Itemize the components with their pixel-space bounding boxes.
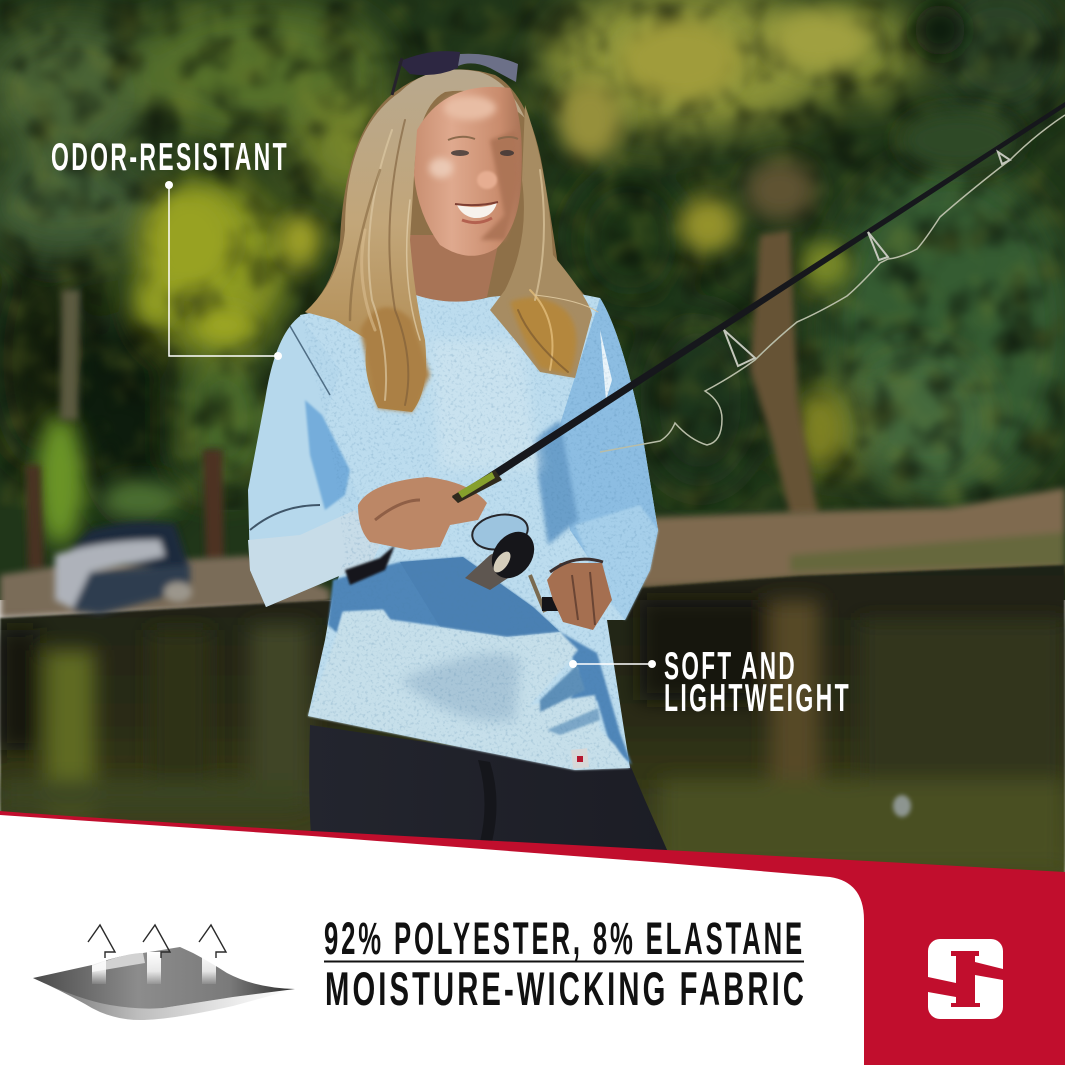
right sleeve	[555, 298, 658, 620]
rod guides and fishing line	[600, 115, 1065, 452]
arrow stems	[92, 952, 106, 984]
foliage mottling	[0, 0, 1065, 510]
fabric top layer	[33, 947, 295, 1009]
near hand on rod	[358, 477, 487, 550]
lower hem light	[308, 610, 630, 770]
fabric text block	[324, 913, 807, 1015]
lake water	[0, 565, 1065, 880]
callout: odor-resistant	[51, 136, 289, 360]
fishing reel	[465, 510, 564, 612]
callout: soft and lightweight	[569, 645, 851, 720]
far hand on reel handle	[547, 563, 612, 630]
fabric lower layer	[33, 978, 295, 1020]
icon: moisture-wicking fabric	[33, 925, 295, 1020]
shirt body	[248, 290, 660, 770]
left sleeve	[248, 316, 372, 607]
inner arm shade	[305, 400, 350, 510]
callout: soft and lightweight: LIGHTWEIGHT	[664, 677, 851, 720]
white info panel	[0, 815, 864, 1065]
neck	[407, 235, 500, 303]
leggings	[309, 725, 668, 852]
hair back	[305, 69, 600, 410]
shoreline	[0, 488, 1065, 618]
floating buoy	[893, 795, 911, 817]
angler woman	[248, 51, 1065, 852]
shirt tag	[571, 748, 589, 769]
lower blue patches	[540, 665, 585, 712]
callout: odor-resistant: ODOR-RESISTANT	[51, 136, 289, 179]
waist shadow	[328, 557, 632, 765]
shadow under forearm	[345, 545, 395, 585]
callout: soft and lightweight: SOFT AND	[664, 645, 797, 688]
brand logo	[928, 939, 1003, 1019]
fishing rod	[452, 102, 1065, 503]
red corner band	[0, 811, 1065, 1065]
nose	[477, 171, 497, 189]
print texture	[400, 653, 520, 722]
smile	[457, 203, 497, 218]
eyes and brows	[448, 137, 475, 140]
tree trunks	[26, 230, 818, 570]
moored boat	[55, 522, 192, 614]
arrow outlines	[88, 925, 226, 958]
hair strands	[350, 120, 598, 405]
sunglasses	[392, 51, 518, 95]
face	[414, 87, 522, 256]
hair front	[305, 70, 598, 412]
